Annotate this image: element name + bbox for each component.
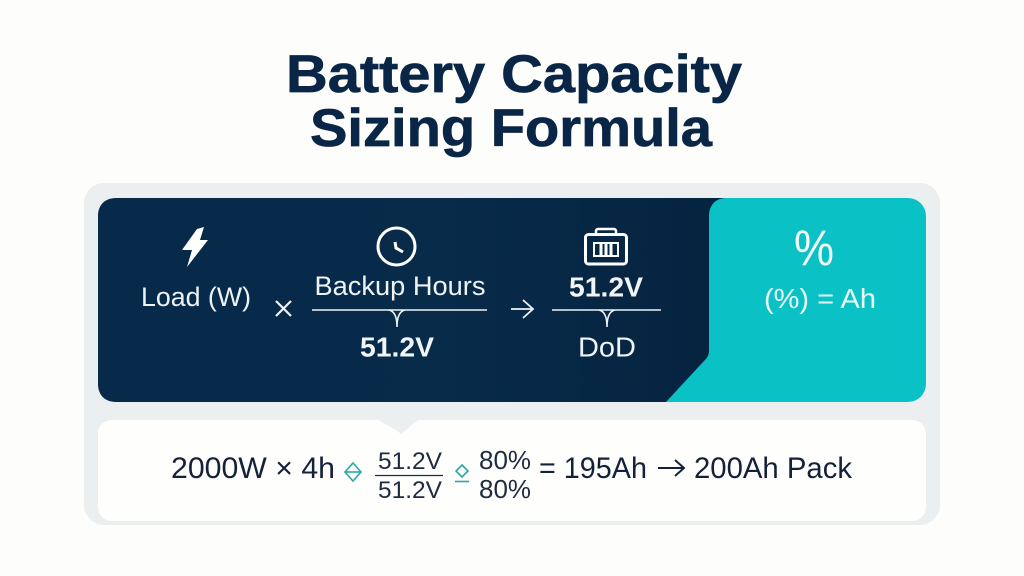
panel: teal result (640, 198, 926, 402)
title (286, 45, 742, 158)
icon: clock (378, 228, 415, 265)
fraction numerator: 51.2V (378, 448, 443, 475)
title: Sizing Formula (310, 99, 713, 158)
backup hours label: Backup Hours (314, 271, 486, 301)
pack size: 200Ah Pack (694, 452, 852, 485)
panel: navy formula (98, 198, 726, 402)
voltage label: 51.2V (360, 332, 434, 362)
voltage numerator: 51.2V (569, 272, 643, 302)
DoD label: DoD (578, 332, 636, 362)
percent top: 80% (479, 445, 531, 475)
fraction denominator: 51.2V (378, 477, 443, 504)
load label: Load (W) (141, 282, 251, 312)
example result: = 195Ah (539, 452, 647, 485)
icon: battery (586, 229, 626, 264)
panel: worked example (98, 420, 926, 521)
arrow (511, 300, 533, 318)
arrow (658, 460, 684, 476)
pointer notch (384, 420, 418, 434)
example text start: 2000W × 4h (171, 452, 335, 485)
fraction rule (375, 474, 443, 476)
result label: (%) = Ah (764, 283, 876, 314)
icon: percent: % (794, 220, 834, 276)
icon: teal diamond divide (345, 463, 361, 481)
title: Battery Capacity (286, 45, 742, 104)
fraction bar (312, 310, 487, 327)
icon: lightning bolt (182, 227, 208, 267)
fraction bar (552, 310, 661, 327)
multiply sign (276, 301, 291, 316)
panel: formula card (84, 183, 940, 525)
percent bottom: 80% (479, 474, 531, 504)
icon: teal diamond (455, 465, 469, 482)
